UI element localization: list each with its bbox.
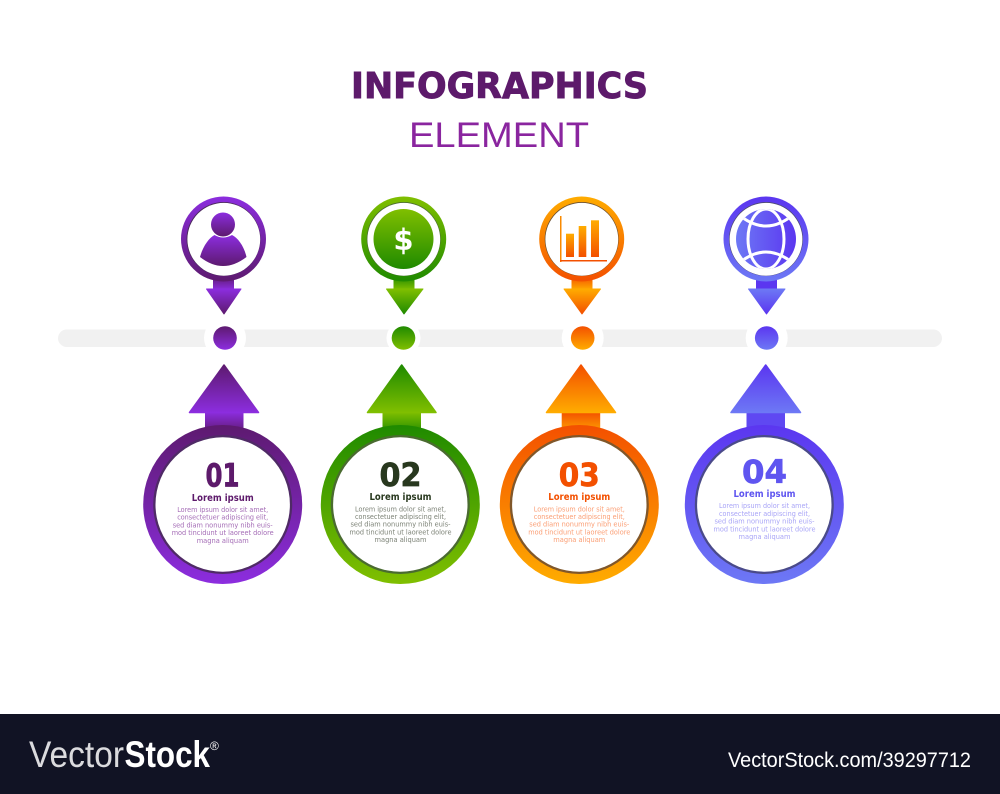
card text: mod tincidunt ut laoreet dolore bbox=[172, 528, 274, 537]
card text bbox=[350, 456, 452, 544]
pin with dollar icon bbox=[361, 196, 446, 314]
card text: magna aliquam bbox=[738, 532, 790, 541]
up arrow bbox=[190, 365, 258, 434]
footer logo: ® bbox=[210, 739, 219, 753]
card text: Lorem ipsum dolor sit amet, bbox=[177, 505, 268, 514]
up arrow bbox=[546, 365, 616, 434]
card text bbox=[714, 453, 816, 541]
heading: element: ELEMENT bbox=[409, 116, 589, 155]
step 2 bbox=[321, 196, 480, 584]
step 4 bbox=[685, 196, 844, 584]
card text: Lorem ipsum bbox=[548, 492, 610, 503]
card text: magna aliquam bbox=[197, 536, 249, 545]
timeline dot bbox=[392, 326, 415, 350]
card text: consectetuer adipiscing elit, bbox=[355, 512, 446, 521]
step 3 bbox=[500, 196, 659, 584]
title bbox=[351, 66, 648, 155]
pin with globe icon bbox=[724, 196, 808, 314]
card text: mod tincidunt ut laoreet dolore bbox=[350, 528, 452, 536]
pin with bar chart icon bbox=[539, 196, 624, 314]
card text: 04 bbox=[742, 453, 787, 491]
footer logo: Stock bbox=[124, 734, 210, 775]
card text: 02 bbox=[380, 456, 422, 494]
card text bbox=[172, 456, 274, 545]
icon: dollar coin: $ bbox=[393, 223, 414, 257]
card text: sed diam nonummy nibh euis- bbox=[714, 517, 815, 526]
icon: bar chart bbox=[560, 216, 607, 262]
card text: magna aliquam bbox=[553, 535, 605, 544]
ring card bbox=[143, 425, 302, 584]
pin with person icon bbox=[181, 196, 266, 314]
icon: globe bbox=[736, 209, 796, 269]
ring card bbox=[500, 425, 659, 584]
up arrow bbox=[731, 365, 800, 434]
ring card bbox=[685, 425, 844, 584]
heading: infographics: INFOGRAPHICS bbox=[351, 66, 648, 107]
card text: Lorem ipsum bbox=[370, 492, 432, 503]
up arrow bbox=[368, 365, 436, 434]
footer url: VectorStock.com/39297712 bbox=[728, 749, 971, 772]
card text: Lorem ipsum bbox=[192, 493, 254, 504]
timeline dot bbox=[755, 326, 778, 350]
card text: consectetuer adipiscing elit, bbox=[719, 509, 810, 518]
ring card bbox=[321, 425, 480, 584]
footer band bbox=[0, 714, 1000, 794]
card text: Lorem ipsum dolor sit amet, bbox=[534, 504, 625, 513]
card text: mod tincidunt ut laoreet dolore bbox=[714, 524, 816, 533]
card text bbox=[528, 456, 631, 544]
card text: magna aliquam bbox=[374, 535, 426, 544]
footer logo bbox=[29, 734, 219, 775]
card text: Lorem ipsum dolor sit amet, bbox=[355, 504, 446, 513]
card text: sed diam nonummy nibh euis- bbox=[350, 520, 451, 529]
card text: sed diam nonummy nibh euis- bbox=[529, 520, 630, 529]
card text: mod tincidunt ut laoreet dolore bbox=[528, 528, 631, 536]
icon: person bbox=[200, 212, 246, 266]
card text: consectetuer adipiscing elit, bbox=[177, 513, 268, 522]
card text: consectetuer adipiscing elit, bbox=[534, 512, 625, 521]
timeline bar bbox=[58, 317, 942, 359]
card text: 03 bbox=[559, 456, 600, 494]
card text: sed diam nonummy nibh euis- bbox=[173, 520, 273, 529]
card text: 01 bbox=[206, 456, 240, 494]
timeline dot bbox=[213, 326, 237, 350]
card text: Lorem ipsum bbox=[734, 489, 796, 500]
timeline dot bbox=[571, 326, 594, 350]
step 1 bbox=[143, 196, 302, 584]
footer logo: Vector bbox=[29, 734, 124, 775]
card text: Lorem ipsum dolor sit amet, bbox=[719, 501, 810, 510]
